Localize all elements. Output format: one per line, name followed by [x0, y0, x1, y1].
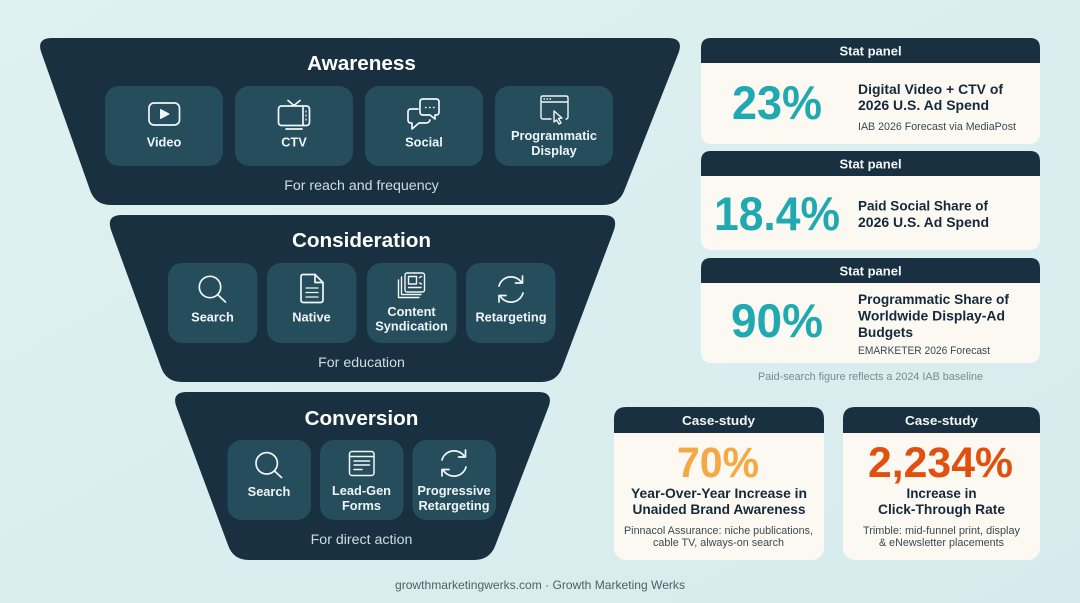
stat description — [858, 291, 1009, 357]
stat description: EMARKETER 2026 Forecast — [858, 345, 990, 357]
tile: Lead-Gen Forms — [320, 440, 404, 520]
stat description: 2026 U.S. Ad Spend — [858, 214, 989, 230]
case description: Trimble: mid-funnel print, display — [863, 525, 1021, 537]
funnel tier: Consideration — [110, 215, 615, 382]
tile: Native: Native — [292, 310, 331, 324]
stat panel: 18.4% — [701, 151, 1040, 250]
stat number: 18.4% — [714, 187, 840, 240]
tile: CTV: CTV — [281, 134, 307, 150]
footer: source credit: growthmarketingwerks.com · Growth Marketing Werks — [395, 578, 685, 592]
stat description: Paid Social Share of — [858, 198, 988, 214]
case study: 70% — [614, 407, 824, 560]
stat panel: 90% — [701, 258, 1040, 363]
tile: Native — [267, 263, 356, 343]
tile: Social — [365, 86, 483, 166]
caption: For education: For education — [318, 355, 405, 371]
tile: Content Syndication — [367, 263, 456, 343]
stat panel: 23% — [701, 38, 1040, 144]
caption: For reach and frequency: For reach and frequency — [284, 178, 440, 194]
icon: magnifier — [256, 453, 282, 478]
tile: CTV — [235, 86, 353, 166]
footnote: paid-search baseline: Paid-search figure reflects a 2024 IAB baseline — [758, 371, 983, 383]
tile: Lead-Gen Forms: Forms — [342, 498, 381, 513]
icon: stacked articles — [398, 273, 424, 298]
tile: Social: Social — [405, 134, 443, 150]
icon: video player — [149, 103, 180, 125]
funnel tier: Conversion — [175, 392, 550, 560]
case description: Year-Over-Year Increase in — [631, 485, 807, 501]
case description: cable TV, always-on search — [653, 537, 784, 549]
funnel tier: Awareness — [40, 38, 680, 205]
case description — [624, 485, 813, 549]
case study: 2,234% — [843, 407, 1040, 560]
case study: 70%: Case-study — [682, 413, 756, 428]
tile: Content Syndication: Syndication — [375, 318, 448, 334]
heading: Consideration: Consideration — [292, 229, 431, 252]
tile: Lead-Gen Forms: Lead-Gen — [332, 483, 391, 498]
caption: For direct action: For direct action — [311, 532, 412, 548]
tile: Programmatic Display: Programmatic — [511, 128, 597, 143]
case study: 2,234%: Case-study — [905, 413, 979, 428]
case description: Pinnacol Assurance: niche publications, — [624, 525, 813, 537]
tile: Programmatic Display — [495, 86, 613, 166]
icon: form window — [350, 452, 374, 476]
icon: television — [278, 100, 310, 129]
tile: Progressive Retargeting: Retargeting — [418, 498, 490, 513]
stat description — [858, 198, 989, 230]
stat description: 2026 U.S. Ad Spend — [858, 97, 989, 113]
tile: Progressive Retargeting: Progressive — [417, 483, 491, 498]
case description — [863, 485, 1021, 549]
tile: Search: Search — [248, 484, 291, 499]
icon: magnifier — [199, 276, 226, 302]
heading: Conversion: Conversion — [305, 407, 418, 430]
tile: Search — [228, 440, 311, 520]
stat panel: 18.4%: Stat panel — [839, 156, 902, 172]
icon: refresh arrows — [499, 276, 523, 302]
icon: refresh arrows — [442, 450, 466, 476]
stat description: Worldwide Display-Ad — [858, 308, 1005, 324]
icon: chat bubbles — [408, 99, 439, 129]
stat description — [858, 81, 1016, 133]
case description: Click-Through Rate — [878, 501, 1005, 517]
tile: Video — [105, 86, 223, 166]
tile: Content Syndication: Content — [387, 304, 436, 319]
stat panel: 23%: Stat panel — [839, 44, 902, 58]
icon: document — [301, 274, 323, 302]
tile: Search: Search — [191, 310, 234, 324]
icon: browser with cursor — [541, 96, 568, 124]
stat number: 90% — [731, 294, 823, 347]
stat description: Digital Video + CTV of — [858, 81, 1003, 97]
tile: Progressive Retargeting — [412, 440, 496, 520]
case description: Unaided Brand Awareness — [632, 501, 806, 517]
tile: Programmatic Display: Display — [531, 143, 578, 158]
stat description: IAB 2026 Forecast via MediaPost — [858, 121, 1016, 133]
tile: Retargeting — [466, 263, 556, 343]
case description: & eNewsletter placements — [879, 537, 1005, 549]
stat number: 23% — [732, 76, 822, 129]
heading: Awareness: Awareness — [307, 52, 416, 75]
case number: 70% — [677, 439, 759, 487]
case description: Increase in — [906, 485, 976, 501]
tile: Retargeting: Retargeting — [475, 310, 547, 324]
case number: 2,234% — [868, 439, 1013, 487]
stat panel: 90%: Stat panel — [839, 264, 902, 278]
stat description: Budgets — [858, 324, 913, 340]
stat description: Programmatic Share of — [858, 291, 1009, 307]
tile: Video: Video — [147, 134, 181, 150]
tile: Search — [168, 263, 258, 343]
